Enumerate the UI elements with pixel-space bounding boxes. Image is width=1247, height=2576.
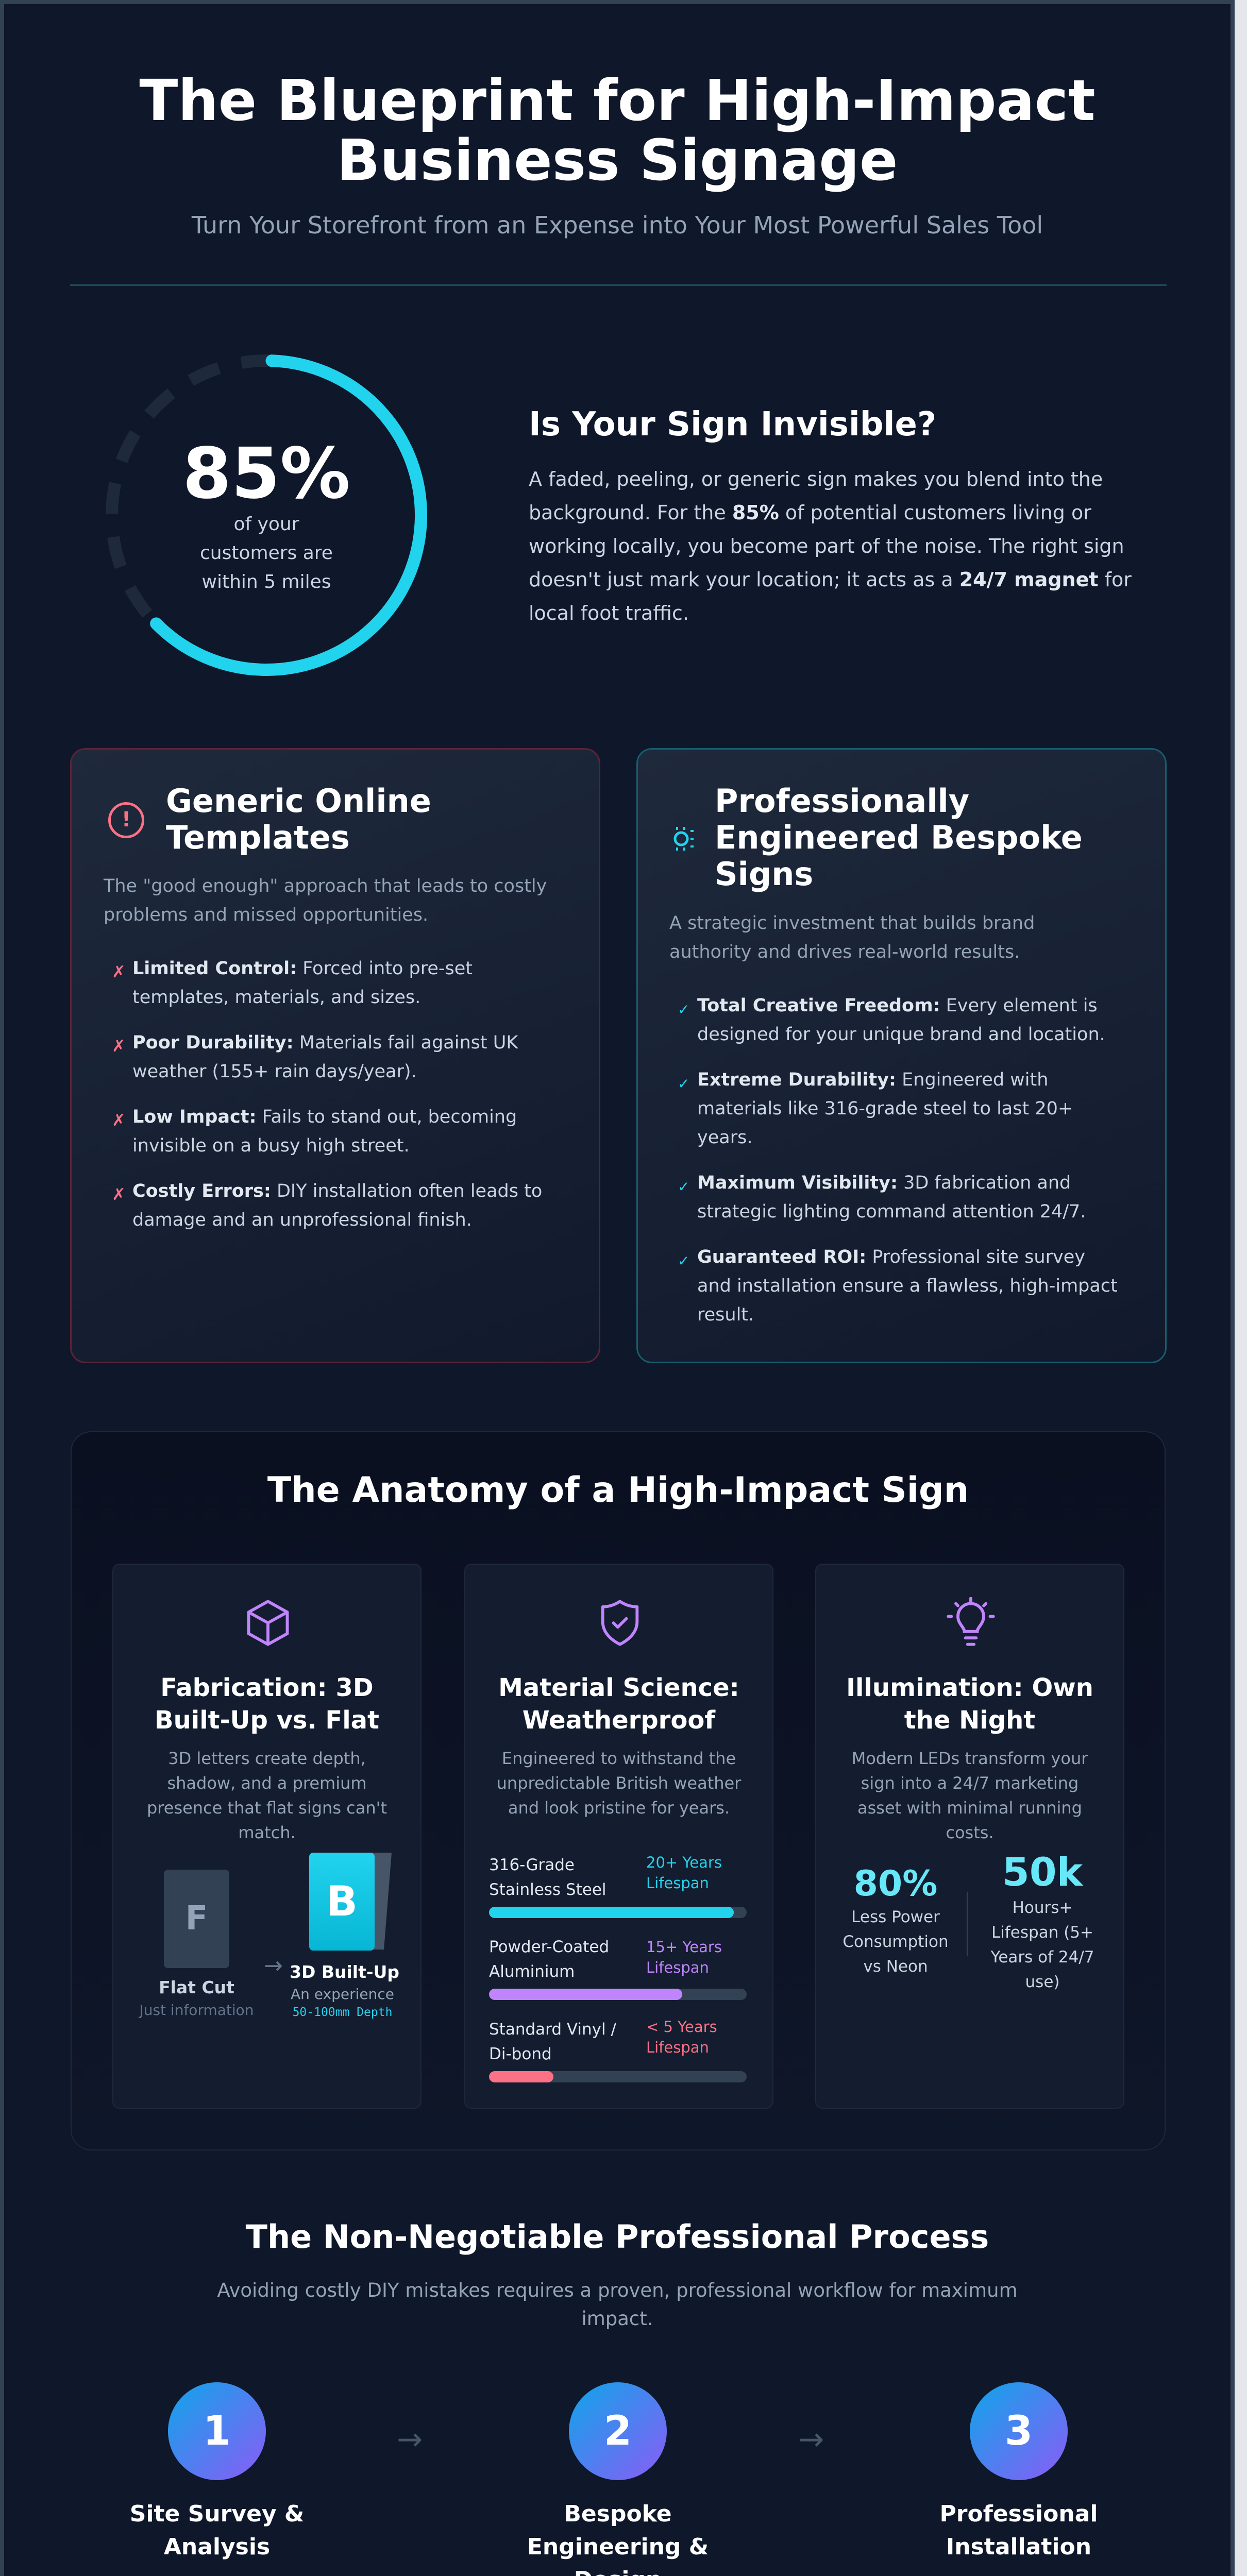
material bars: < 5 Years bbox=[646, 2018, 717, 2036]
bullet list: Extreme Durability: Engineered with bbox=[697, 1070, 1048, 1090]
intro paragraph: background. For the 85% of potential customers living or bbox=[529, 501, 1091, 524]
number badge: 3 bbox=[1005, 2408, 1033, 2454]
material bars bbox=[489, 1854, 747, 2082]
fabrication visual: flat vs 3D: An experience bbox=[291, 1986, 394, 2003]
bullet list: strategic lighting command attention 24/7. bbox=[697, 1201, 1086, 1222]
card text: match. bbox=[238, 1823, 296, 1842]
panel: professionally engineered bespoke signs bbox=[636, 748, 1167, 1363]
stat number: 85% bbox=[182, 433, 350, 515]
card text: Modern LEDs transform your bbox=[852, 1749, 1088, 1768]
panel: professionally engineered bespoke signs: ✓ bbox=[678, 1252, 689, 1269]
bullet list: and installation ensure a flawless, high-impact bbox=[697, 1276, 1118, 1296]
icon: sparkle bbox=[674, 827, 694, 851]
card title: Fabrication: 3D bbox=[160, 1673, 374, 1702]
step title: Installation bbox=[946, 2534, 1091, 2560]
icon: warning bbox=[108, 802, 144, 838]
card title: Built-Up vs. Flat bbox=[155, 1706, 379, 1735]
panel: professionally engineered bespoke signs: ✓ bbox=[678, 1075, 689, 1092]
arrow: → bbox=[798, 2421, 824, 2458]
subtitle: Turn Your Storefront from an Expense into Your Most Powerful Sales Tool bbox=[192, 211, 1043, 239]
material bars: Lifespan bbox=[646, 1874, 709, 1892]
card: illumination bbox=[815, 1564, 1124, 2109]
stat label: of your bbox=[233, 514, 299, 535]
bullet list: years. bbox=[697, 1127, 752, 1148]
fabrication visual: flat vs 3D: 50-100mm Depth bbox=[293, 2006, 392, 2019]
process subtitle bbox=[217, 2279, 1018, 2330]
arrow: → bbox=[264, 1953, 283, 1979]
card title bbox=[498, 1673, 739, 1735]
process heading: The Non-Negotiable Professional Process bbox=[246, 2218, 989, 2256]
row: stainless steel: 316-Grade bbox=[489, 1856, 575, 1874]
stat label bbox=[200, 514, 333, 592]
step title: Professional bbox=[940, 2501, 1098, 2527]
card text: shadow, and a premium bbox=[167, 1773, 367, 1793]
bullet list: Guaranteed ROI: Professional site survey bbox=[697, 1247, 1085, 1267]
row: aluminium: Powder-Coated bbox=[489, 1938, 609, 1956]
card text: asset with minimal running bbox=[857, 1798, 1082, 1818]
stat: 80%: vs Neon bbox=[863, 1957, 928, 1976]
3D letter bbox=[371, 1853, 392, 1950]
number badge: 2 bbox=[604, 2408, 632, 2454]
stat: 50k: Hours+ bbox=[1013, 1899, 1072, 1917]
title bbox=[139, 67, 1096, 193]
step title: Site Survey & bbox=[130, 2501, 304, 2527]
anatomy heading: The Anatomy of a High-Impact Sign bbox=[267, 1470, 969, 1511]
material bars: 15+ Years bbox=[646, 1938, 722, 1956]
stat: 50k: 50k bbox=[1002, 1849, 1083, 1895]
heading: Generic Online bbox=[166, 782, 431, 820]
step 1 bbox=[115, 2382, 319, 2576]
icon: cube bbox=[247, 1600, 289, 1646]
process subtitle: impact. bbox=[581, 2308, 653, 2330]
description: A strategic investment that builds brand bbox=[669, 913, 1035, 934]
step 3 bbox=[909, 2382, 1128, 2576]
stat: 50k bbox=[990, 1849, 1094, 1991]
flat cut letter: F bbox=[186, 1900, 208, 1938]
card text: costs. bbox=[946, 1823, 994, 1842]
panel: professionally engineered bespoke signs: ✓ bbox=[678, 1001, 689, 1018]
card title: the Night bbox=[904, 1706, 1035, 1735]
arrow: → bbox=[397, 2421, 423, 2458]
heading: Is Your Sign Invisible: Is Your Sign Invisible? bbox=[529, 405, 936, 444]
panel: generic online templates: ✗ bbox=[112, 1110, 126, 1130]
bullet list bbox=[112, 958, 542, 1230]
card text: sign into a 24/7 marketing bbox=[861, 1773, 1079, 1793]
bullet list: templates, materials, and sizes. bbox=[132, 987, 420, 1008]
panel: generic online templates: ✗ bbox=[112, 962, 126, 981]
number badge bbox=[569, 2382, 667, 2480]
heading bbox=[166, 782, 431, 856]
card text bbox=[497, 1749, 741, 1818]
card title: Illumination: Own bbox=[846, 1673, 1093, 1702]
bullet list: designed for your unique brand and location. bbox=[697, 1024, 1105, 1045]
description: problems and missed opportunities. bbox=[104, 905, 428, 925]
card text: 3D letters create depth, bbox=[168, 1749, 366, 1768]
card text: and look pristine for years. bbox=[508, 1798, 730, 1818]
panel: anatomy of a high-impact sign bbox=[71, 1431, 1166, 2150]
stat: 50k: Years of 24/7 bbox=[990, 1948, 1094, 1967]
card text: unpredictable British weather bbox=[497, 1773, 741, 1793]
bullet list: Poor Durability: Materials fail against UK bbox=[132, 1032, 518, 1053]
heading: Professionally bbox=[715, 782, 969, 820]
bullet list: invisible on a busy high street. bbox=[132, 1136, 410, 1156]
step title: Analysis bbox=[164, 2534, 270, 2560]
material bars: Lifespan bbox=[646, 1959, 709, 1976]
stat: 50k: use) bbox=[1025, 1973, 1059, 1991]
bullet list bbox=[678, 995, 1118, 1325]
card: fabrication bbox=[112, 1564, 422, 2109]
bullet list: damage and an unprofessional finish. bbox=[132, 1210, 472, 1230]
icon: bulb bbox=[947, 1597, 995, 1646]
panel: generic online templates: ✗ bbox=[112, 1036, 126, 1056]
number badge: 1 bbox=[203, 2408, 231, 2454]
description bbox=[103, 876, 547, 925]
intro paragraph bbox=[529, 468, 1132, 624]
fabrication visual: flat vs 3D bbox=[139, 1853, 399, 2019]
title: The Blueprint for High-Impact bbox=[139, 67, 1096, 133]
step title bbox=[859, 2498, 1178, 2564]
card title: Material Science: bbox=[498, 1673, 739, 1702]
step 2 bbox=[527, 2382, 709, 2576]
stat ring: 85% bbox=[106, 354, 427, 676]
process subtitle: Avoiding costly DIY mistakes requires a proven, professional workflow for maximum bbox=[217, 2279, 1018, 2301]
card text bbox=[147, 1749, 387, 1842]
step title: Bespoke bbox=[564, 2501, 672, 2527]
row: vinyl: Standard Vinyl / bbox=[489, 2020, 616, 2039]
bullet list: result. bbox=[697, 1304, 754, 1325]
description bbox=[669, 913, 1035, 962]
step title bbox=[527, 2501, 709, 2576]
stat label: within 5 miles bbox=[202, 571, 331, 592]
number badge bbox=[970, 2382, 1068, 2480]
icon: shield bbox=[601, 1600, 639, 1646]
card text: Engineered to withstand the bbox=[502, 1749, 736, 1768]
fabrication visual: flat vs 3D: Just information bbox=[139, 2002, 254, 2019]
intro paragraph: local foot traffic. bbox=[529, 602, 689, 624]
step title: Engineering & bbox=[527, 2534, 709, 2560]
card title bbox=[846, 1673, 1093, 1735]
stat: 80%: Less Power bbox=[851, 1908, 940, 1926]
material bars: Lifespan bbox=[646, 2039, 709, 2056]
row: stainless steel bbox=[489, 1856, 606, 1899]
bullet list: Limited Control: Forced into pre-set bbox=[132, 958, 473, 979]
stat: 80%: 80% bbox=[854, 1863, 937, 1904]
intro paragraph: A faded, peeling, or generic sign makes you blend into the bbox=[529, 468, 1103, 490]
card title bbox=[155, 1673, 379, 1735]
bullet list: Low Impact: Fails to stand out, becoming bbox=[132, 1107, 517, 1127]
row: stainless steel: Stainless Steel bbox=[489, 1880, 606, 1899]
panel: generic online templates: ✗ bbox=[112, 1184, 126, 1204]
stat: 50k: Lifespan (5+ bbox=[991, 1923, 1093, 1942]
panel: generic online templates bbox=[70, 748, 600, 1363]
heading bbox=[715, 782, 1083, 893]
heading: Signs bbox=[715, 855, 813, 893]
bullet list: weather (155+ rain days/year). bbox=[132, 1061, 417, 1082]
card text: presence that flat signs can't bbox=[147, 1798, 387, 1818]
flat cut letter bbox=[164, 1870, 229, 1968]
title: Business Signage bbox=[336, 127, 898, 193]
intro paragraph: doesn't just mark your location; it acts as a 24/7 magnet for bbox=[529, 568, 1132, 591]
step title bbox=[130, 2501, 304, 2560]
number badge bbox=[168, 2382, 266, 2480]
icon: warning: ! bbox=[122, 808, 131, 832]
bullet list: Costly Errors: DIY installation often leads to bbox=[132, 1181, 542, 1201]
material bars: 20+ Years bbox=[646, 1854, 722, 1871]
panel: professionally engineered bespoke signs: ✓ bbox=[678, 1178, 689, 1195]
card text bbox=[852, 1749, 1088, 1842]
card: material science bbox=[464, 1564, 773, 2109]
row: aluminium: Aluminium bbox=[489, 1962, 575, 1981]
description: The "good enough" approach that leads to costly bbox=[104, 876, 547, 896]
heading: Templates bbox=[166, 819, 350, 856]
row: aluminium bbox=[489, 1938, 609, 1981]
flat cut label: Flat Cut bbox=[159, 1977, 234, 1997]
3D label: 3D Built-Up bbox=[290, 1962, 399, 1982]
description: authority and drives real-world results. bbox=[669, 942, 1020, 962]
row: vinyl bbox=[489, 2020, 616, 2063]
heading: Engineered Bespoke bbox=[715, 819, 1083, 856]
bullet list: materials like 316-grade steel to last 20+ bbox=[697, 1098, 1073, 1119]
stat: 80%: Consumption bbox=[842, 1933, 949, 1951]
stat: 80% bbox=[842, 1863, 949, 1976]
intro paragraph: working locally, you become part of the noise. The right sign bbox=[529, 535, 1124, 557]
stat label: customers are bbox=[200, 543, 333, 564]
fabrication visual: flat vs 3D: B bbox=[326, 1877, 358, 1925]
bullet list: Total Creative Freedom: Every element is bbox=[697, 995, 1098, 1016]
card title: Weatherproof bbox=[523, 1706, 715, 1735]
bullet list: Maximum Visibility: 3D fabrication and bbox=[697, 1173, 1071, 1193]
row: vinyl: Di-bond bbox=[489, 2045, 552, 2063]
